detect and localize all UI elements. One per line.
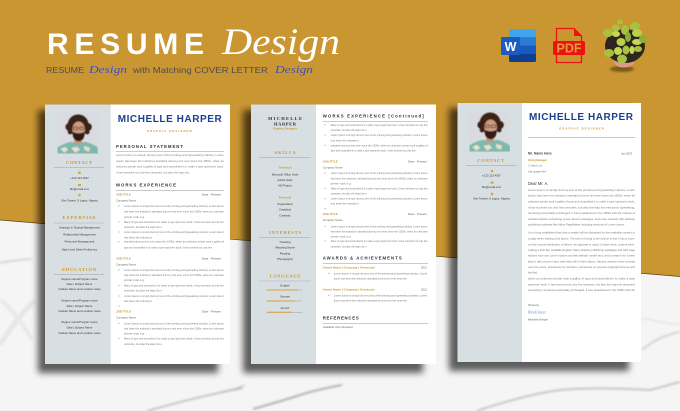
letter body: Ipsum has been the industry's standard dummy text ever since the 1500s, when an xyxy=(528,194,636,198)
sidebar: expertise: Strategic & Tactical Management xyxy=(59,226,100,230)
recipient block: Hiring Manager xyxy=(528,158,548,162)
recipient block: 1 T. down Co. Ltd xyxy=(528,164,542,168)
personal statement xyxy=(116,144,225,175)
sidebar: contact xyxy=(466,158,517,201)
sidebar: contact: Shri Towers, 9 Lagos, Nigeria xyxy=(61,199,98,203)
awards and achievements xyxy=(323,256,428,302)
works experience continued: printer took a g xyxy=(331,181,351,185)
personal statement: It has survived not only five centuries, but also the leap into. xyxy=(116,171,190,175)
panel: resume page 2 xyxy=(251,104,436,364)
sidebar: skills xyxy=(259,150,311,217)
works experience: Lorem Ipsum is simply dummy text of the printing and typesetting industry. Lorem Ipsum xyxy=(124,204,225,208)
works experience continued: Lorem Ipsum is simply dummy text of the printing and typesetting industry. Lorem Ipsum xyxy=(331,133,428,137)
job title: GRAPHIC DESIGNER xyxy=(559,127,605,131)
works experience: printer took a g xyxy=(124,215,145,219)
sidebar: education: Institute Name and Location name xyxy=(58,331,101,335)
job title: GRAPHIC DESIGNER xyxy=(147,129,193,133)
awards and achievements: Lorem Ipsum is simply dummy text of the printing and typesetting industry. Lorem xyxy=(334,271,428,275)
letter body: ipsum' will uncover many web sites still in their infancy. Various versions have evolved xyxy=(528,259,636,263)
works experience continued: Many of type and scrambled it to make a type specimen book. It has survived not only five xyxy=(331,123,428,127)
recipient block: Jan 2023 xyxy=(621,151,632,155)
works experience: Company Name xyxy=(116,316,136,320)
letter body: Letraset sheets containing Lorem Ipsum passages, and more recently with desktop xyxy=(528,217,636,221)
title: RESUME xyxy=(47,28,204,61)
works experience continued: Many of type and scrambled it to make a type specimen book. It has survived not only five xyxy=(331,186,428,190)
sidebar: education: Degree name/Program name xyxy=(61,299,98,303)
awards and achievements: Ipsum has been the industry's standard dummy text ever since the xyxy=(334,298,407,302)
letter body: editors now use Lorem Ipsum as their default model text, and a search for 'lorem xyxy=(528,254,636,258)
works experience continued: Lorem Ipsum is simply dummy text of the printing and typesetting industry. Lorem Ipsum xyxy=(331,171,428,175)
references: Available Upon Request xyxy=(323,325,353,329)
references: REFERENCES xyxy=(323,316,359,320)
works experience continued: has been the industry's xyxy=(331,202,359,206)
background: gold panel xyxy=(0,0,680,276)
recipient block: Your Location Here xyxy=(528,169,546,173)
sidebar name: HARPER xyxy=(274,122,297,126)
letter body: Lorem Ipsum is simply dummy text of the printing and typesetting industry. Lorem xyxy=(528,188,636,192)
sidebar: skills: Microsoft Office Suite xyxy=(272,172,299,176)
sidebar: education: Institute Name and Location name xyxy=(58,287,101,291)
works experience continued xyxy=(323,114,428,248)
works experience continued: printer took a g xyxy=(331,234,351,238)
sidebar: interests: Traveling xyxy=(279,240,291,244)
works experience: Company Name xyxy=(116,199,136,203)
sidebar: education: Degree name/Program name xyxy=(61,277,98,281)
works experience continued: Lorem Ipsum is simply dummy text of the printing and typesetting industry. Lorem Ipsum xyxy=(331,197,428,201)
sidebar: contact: Me@email.com xyxy=(482,185,502,189)
letter body: when an unknown printer took a galley of type and scrambled it to make a type xyxy=(528,276,636,280)
works experience continued: Company Name xyxy=(323,165,343,169)
letter body: unknown printer took a galley of type and scrambled it to make a type specimen book. xyxy=(528,199,635,203)
icon: pdf xyxy=(553,28,585,62)
sidebar: language: French xyxy=(281,306,290,310)
sidebar: interests: Reading xyxy=(280,251,291,255)
works experience: Lorem Ipsum is simply dummy text of the printing and typesetting industry. Lorem Ipsum xyxy=(124,230,225,234)
works experience xyxy=(116,183,225,346)
works experience: Date - Present xyxy=(202,193,221,197)
works experience: JOB TITLE xyxy=(116,193,131,197)
works experience: has been the industry's xyxy=(124,299,153,303)
sidebar: skills: Technical xyxy=(278,166,292,170)
subtitle: Design xyxy=(274,65,313,76)
personal statement: Lorem Ipsum is simply dummy text of the printing and typesetting industry. Lorem xyxy=(116,153,225,157)
icon: word: W xyxy=(505,40,517,54)
sidebar: expertise: High Level Sales Proficiency xyxy=(62,248,98,252)
works experience continued: JOB TITLE xyxy=(323,159,338,163)
works experience continued: Lorem Ipsum is simply dummy text of the printing and typesetting industry. Lorem Ipsum xyxy=(331,224,428,228)
panel: cover letter page xyxy=(458,103,641,362)
works experience continued: JOB TITLE xyxy=(323,212,338,216)
recipient block: Mr. Name Here xyxy=(528,151,552,155)
sidebar: skills: Adobe Suite xyxy=(277,178,293,182)
sidebar: contact: CONTACT xyxy=(66,160,92,165)
works experience continued: has been the industry's standard dummy text ever since the 1500s, when an unknown xyxy=(331,176,428,180)
signature block xyxy=(527,303,548,322)
awards and achievements: Award Name | Company | University xyxy=(323,265,375,269)
sidebar: interests xyxy=(259,230,311,261)
sidebar: skills: SKILLS xyxy=(274,150,296,155)
sidebar name xyxy=(268,116,302,131)
references xyxy=(323,316,428,329)
awards and achievements: AWARDS & ACHIEVEMENTS xyxy=(323,256,402,260)
sidebar: skills: Personal xyxy=(279,195,291,199)
works experience: JOB TITLE xyxy=(116,256,131,260)
works experience: printer took a g xyxy=(124,278,145,282)
works experience: has been the industry's standard dummy text ever since the 1500s, when an unknown xyxy=(124,273,224,277)
works experience continued: standard dummy text ever since the 1500s, when an unknown printer took a galley of xyxy=(331,143,428,147)
sidebar: expertise xyxy=(54,215,104,252)
sidebar: education: Date | Subject Name xyxy=(67,326,93,330)
awards and achievements: 2021 xyxy=(421,265,427,269)
name heading: MICHELLE HARPER xyxy=(529,112,634,123)
title xyxy=(47,22,340,63)
sidebar: skills: MS Project xyxy=(278,184,292,188)
sidebar: language: English xyxy=(280,283,290,287)
sidebar: expertise: EXPERTISE xyxy=(62,215,96,220)
works experience: has been the industry's standard dummy text ever since the 1500s, when an unknown xyxy=(124,210,224,214)
letter body: remaining essentially unchanged. It was popularised in the 1960s with the release of xyxy=(528,211,635,215)
letter body: It is a long established fact that a reader will be distracted by the readable content of xyxy=(528,231,635,235)
sidebar: education xyxy=(54,267,104,335)
works experience: printer took a g xyxy=(124,332,145,336)
sidebar: skills: Organization xyxy=(277,202,293,206)
works experience: has been the industry's standard dummy text ever since the 1500s, when an unknown xyxy=(124,327,224,331)
letter body: making it look like readable English. Many desktop publishing packages and web page xyxy=(528,248,636,252)
panel: resume page 1 xyxy=(45,104,230,364)
sidebar: language: LANGUAGE xyxy=(270,274,300,278)
personal statement: Ipsum has been the industry's standard dummy text ever since the 1500s, when an xyxy=(116,159,225,163)
works experience: centuries, but also the leap into e xyxy=(124,342,162,346)
photo xyxy=(469,111,510,152)
letter body: over the years, sometimes by accident, sometimes on purpose (injected humour and xyxy=(528,265,636,269)
works experience: Date - Present xyxy=(202,256,221,260)
sidebar: skills: Creativity xyxy=(279,213,291,217)
sidebar: contact: +123 123 4567 xyxy=(70,176,89,180)
sidebar name: MICHELLE xyxy=(268,116,302,121)
works experience: Many of type and scrambled it to make a type specimen book. It has survived not only five xyxy=(124,283,224,287)
works experience: type and scrambled it to make a type specimen book. It has survived not only five xyxy=(124,245,212,249)
sidebar: contact: CONTACT xyxy=(477,158,504,163)
subtitle: RESUME xyxy=(46,65,84,75)
works experience: WORKS EXPERIENCE xyxy=(116,183,176,188)
sidebar: education: EDUCATION xyxy=(62,267,97,272)
page shadows xyxy=(38,108,629,373)
sidebar: contact: Me@email.com xyxy=(70,187,90,191)
works experience continued: type and scrambled it to make a type specimen book. It has survived not only five xyxy=(331,149,416,153)
works experience continued: Many of type and scrambled it to make a type specimen book. It has survived not only five xyxy=(331,239,428,243)
salutation: Dear Mr. A. xyxy=(528,181,548,186)
signature block: Michelle Harper xyxy=(527,310,546,314)
works experience: centuries, but also the leap into e xyxy=(124,289,162,293)
works experience: Lorem Ipsum is simply dummy text of the printing and typesetting industry. Lorem Ipsum xyxy=(124,321,225,325)
works experience: Company Name xyxy=(116,263,136,267)
works experience continued: centuries, but also the leap into e xyxy=(331,192,367,196)
letter body: typesetting, remaining essentially unchanged. It was popularised in the 1960s with the xyxy=(528,288,636,292)
works experience continued: centuries, but also the leap into e xyxy=(331,244,367,248)
works experience continued: has been the industry's standard dummy text ever since the 1500s, when an unknown xyxy=(331,229,428,233)
works experience: JOB TITLE xyxy=(116,309,131,313)
sidebar: skills: Analytical xyxy=(279,208,291,212)
letter body: specimen book. It has survived not only five centuries, but also the leap into electronic xyxy=(528,282,636,286)
signature block: Michelle Harper xyxy=(528,318,548,322)
sidebar: education: Date | Subject Name xyxy=(67,304,93,308)
letter body: It has survived not only five centuries, but also the leap into electronic typesetting, xyxy=(528,205,635,209)
sidebar: language: German xyxy=(280,295,290,299)
signature block: Sincerely, xyxy=(528,303,540,307)
works experience continued: Company Name xyxy=(323,218,343,222)
works experience: Many of type and scrambled it to make a type specimen book. It has survived not only five xyxy=(124,220,224,224)
works experience continued: WORKS EXPERIENCE [Continued] xyxy=(323,114,424,118)
sidebar: interests: Photography xyxy=(277,257,294,261)
sidebar: interests: INTERESTS xyxy=(269,230,301,235)
subtitle: Design xyxy=(88,65,127,76)
sidebar: language xyxy=(259,274,311,312)
personal statement: PERSONAL STATEMENT xyxy=(116,144,183,149)
sidebar: education: Date | Subject Name xyxy=(67,282,93,286)
sidebar: contact: +123 123 4567 xyxy=(482,174,501,178)
recipient block xyxy=(528,151,632,173)
works experience: Lorem Ipsum is simply dummy text of the printing and typesetting industry. Lorem Ipsum xyxy=(124,294,225,298)
sidebar: education: Institute Name and Location name xyxy=(58,309,101,313)
works experience: Many of type and scrambled it to make a type specimen book. It has survived not only five xyxy=(124,337,224,341)
sidebar name: Graphic Designer xyxy=(273,127,298,131)
works experience: standard dummy text ever since the 1500s, when an unknown printer took a galley of xyxy=(124,240,224,244)
icon: plant xyxy=(603,20,647,72)
letter body xyxy=(528,188,636,292)
name heading: MICHELLE HARPER xyxy=(118,114,222,125)
sidebar: expertise: Personnel Management xyxy=(65,240,95,244)
sidebar: contact: Shri Towers, 9 Lagos, Nigeria xyxy=(473,197,510,201)
works experience continued: Date - Present xyxy=(408,159,427,163)
personal statement: unknown printer took a galley of type and scrambled it to make a type specimen book. xyxy=(116,165,224,169)
sidebar: contact xyxy=(54,160,104,203)
icon: pdf: PDF xyxy=(556,42,582,56)
photo xyxy=(57,113,98,154)
letter body: the like). xyxy=(528,271,538,275)
sidebar: expertise: Relationship Management xyxy=(63,233,96,237)
letter body: a page when looking at its layout. The point of using Lorem Ipsum is that it has a more- xyxy=(528,236,635,240)
works experience: centuries, but also the leap into e xyxy=(124,225,162,229)
awards and achievements: Lorem Ipsum is simply dummy text of the printing and typesetting industry. Lorem xyxy=(334,293,428,297)
subtitle xyxy=(46,65,313,76)
works experience: has been the industry's xyxy=(124,235,153,239)
letter body: publishing software like Aldus PageMaker including versions of Lorem Ipsum. xyxy=(528,223,625,227)
icon: word xyxy=(501,29,536,62)
sidebar: education: Degree name/Program name xyxy=(61,320,98,324)
works experience continued: centuries, but also the leap into e xyxy=(331,128,367,132)
awards and achievements: 2021 xyxy=(421,287,427,291)
subtitle: with Matching COVER LETTER xyxy=(132,65,268,75)
awards and achievements: Ipsum has been the industry's standard dummy text ever since the xyxy=(334,276,407,280)
works experience continued: has been the industry's xyxy=(331,138,359,142)
awards and achievements: Award Name | Company | University xyxy=(323,287,375,291)
title: Design xyxy=(221,22,340,63)
sidebar: interests: Watching Movie xyxy=(275,246,295,250)
works experience: Date - Present xyxy=(202,309,221,313)
letter body: or-less normal distribution of letters, as opposed to using 'Content here, content here', xyxy=(528,242,635,246)
works experience continued: Date - Present xyxy=(408,212,427,216)
works experience: Lorem Ipsum is simply dummy text of the printing and typesetting industry. Lorem Ipsum xyxy=(124,268,225,272)
